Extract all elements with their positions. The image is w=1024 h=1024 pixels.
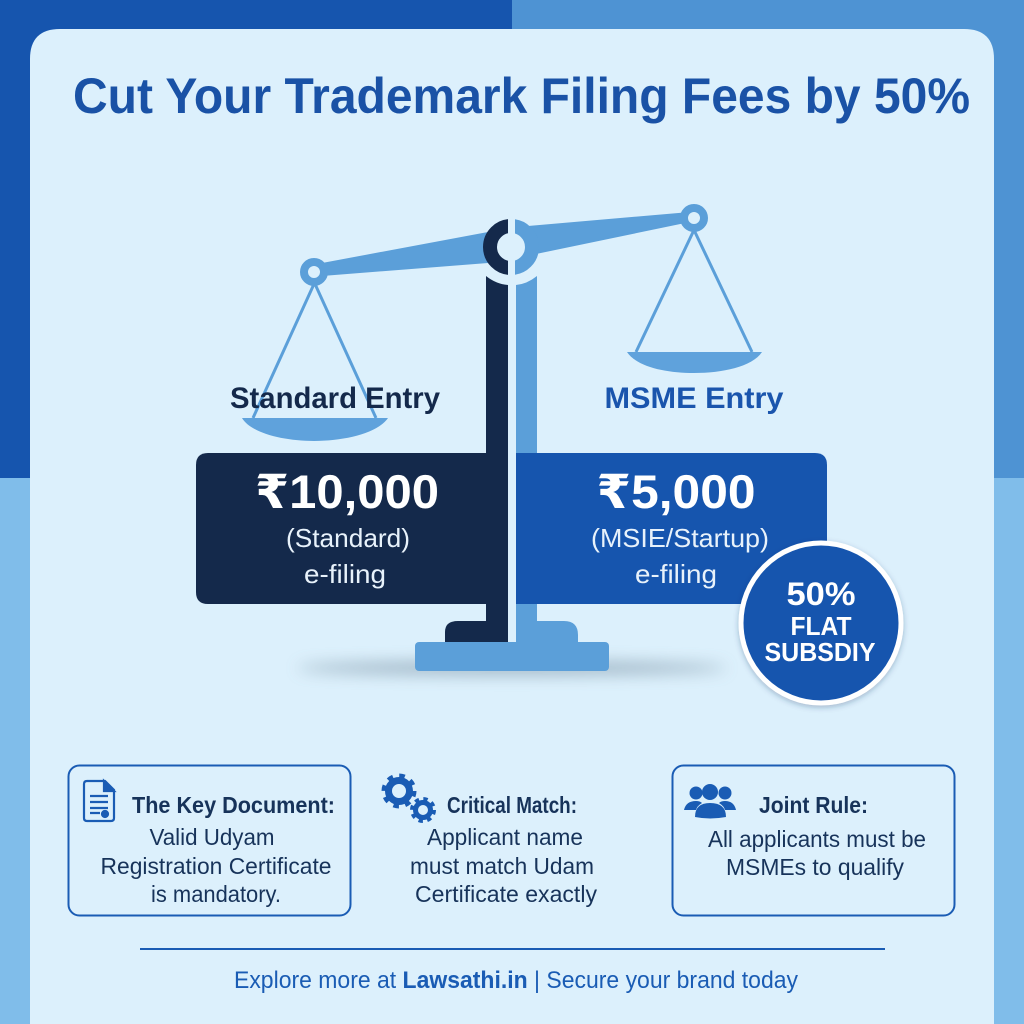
badge: 50% flat subsidy bbox=[741, 543, 901, 703]
card: joint rule: MSMEs to qualify bbox=[726, 854, 904, 880]
block: critical match: Applicant name bbox=[427, 824, 583, 850]
card: the key document: The Key Document: bbox=[132, 792, 335, 818]
badge: 50% flat subsidy: 50% bbox=[786, 576, 856, 612]
column bbox=[486, 276, 537, 642]
card: the key document bbox=[68, 766, 350, 916]
card: the key document: Registration Certificate bbox=[100, 853, 332, 879]
panel: standard fee: (Standard) bbox=[286, 523, 410, 553]
title: Cut Your Trademark Filing Fees by 50% bbox=[73, 68, 970, 124]
left ring bbox=[304, 262, 324, 282]
panel: msme fee bbox=[516, 453, 827, 604]
label: standard entry: Standard Entry bbox=[230, 382, 440, 415]
icon: people bbox=[684, 784, 736, 818]
icon: document bbox=[84, 781, 114, 821]
badge: 50% flat subsidy: SUBSDIY bbox=[764, 637, 876, 667]
block: critical match bbox=[384, 776, 597, 907]
left beam bbox=[322, 232, 488, 276]
left pan bbox=[242, 284, 388, 441]
panel: standard fee bbox=[196, 453, 508, 604]
right beam bbox=[528, 212, 690, 254]
block: critical match: must match Udam bbox=[410, 853, 594, 879]
base shadow bbox=[297, 662, 727, 674]
block: critical match: Critical Match: bbox=[447, 792, 577, 818]
card: joint rule: All applicants must be bbox=[708, 826, 926, 852]
card: the key document: Valid Udyam bbox=[150, 824, 274, 850]
pivot bbox=[490, 226, 532, 268]
footer: Explore more at Lawsathi.in | Secure your brand today bbox=[234, 967, 798, 994]
panel: standard fee: ₹10,000 bbox=[255, 465, 439, 518]
right ring bbox=[684, 208, 704, 228]
card: the key document: is mandatory. bbox=[151, 881, 281, 907]
panel: msme fee: e-filing bbox=[635, 559, 717, 589]
panel: standard fee: e-filing bbox=[304, 559, 386, 589]
panel: msme fee: (MSIE/Startup) bbox=[591, 523, 769, 553]
right pan bbox=[627, 230, 762, 373]
panel: msme fee: ₹5,000 bbox=[596, 465, 756, 518]
badge: 50% flat subsidy: FLAT bbox=[790, 611, 852, 641]
label: msme entry: MSME Entry bbox=[604, 382, 784, 415]
block: critical match: Certificate exactly bbox=[415, 881, 597, 907]
card: joint rule: Joint Rule: bbox=[759, 792, 868, 818]
balance scale illustration bbox=[242, 208, 762, 674]
icon: gears bbox=[384, 776, 434, 821]
card: joint rule bbox=[672, 766, 954, 916]
base bbox=[415, 604, 609, 671]
